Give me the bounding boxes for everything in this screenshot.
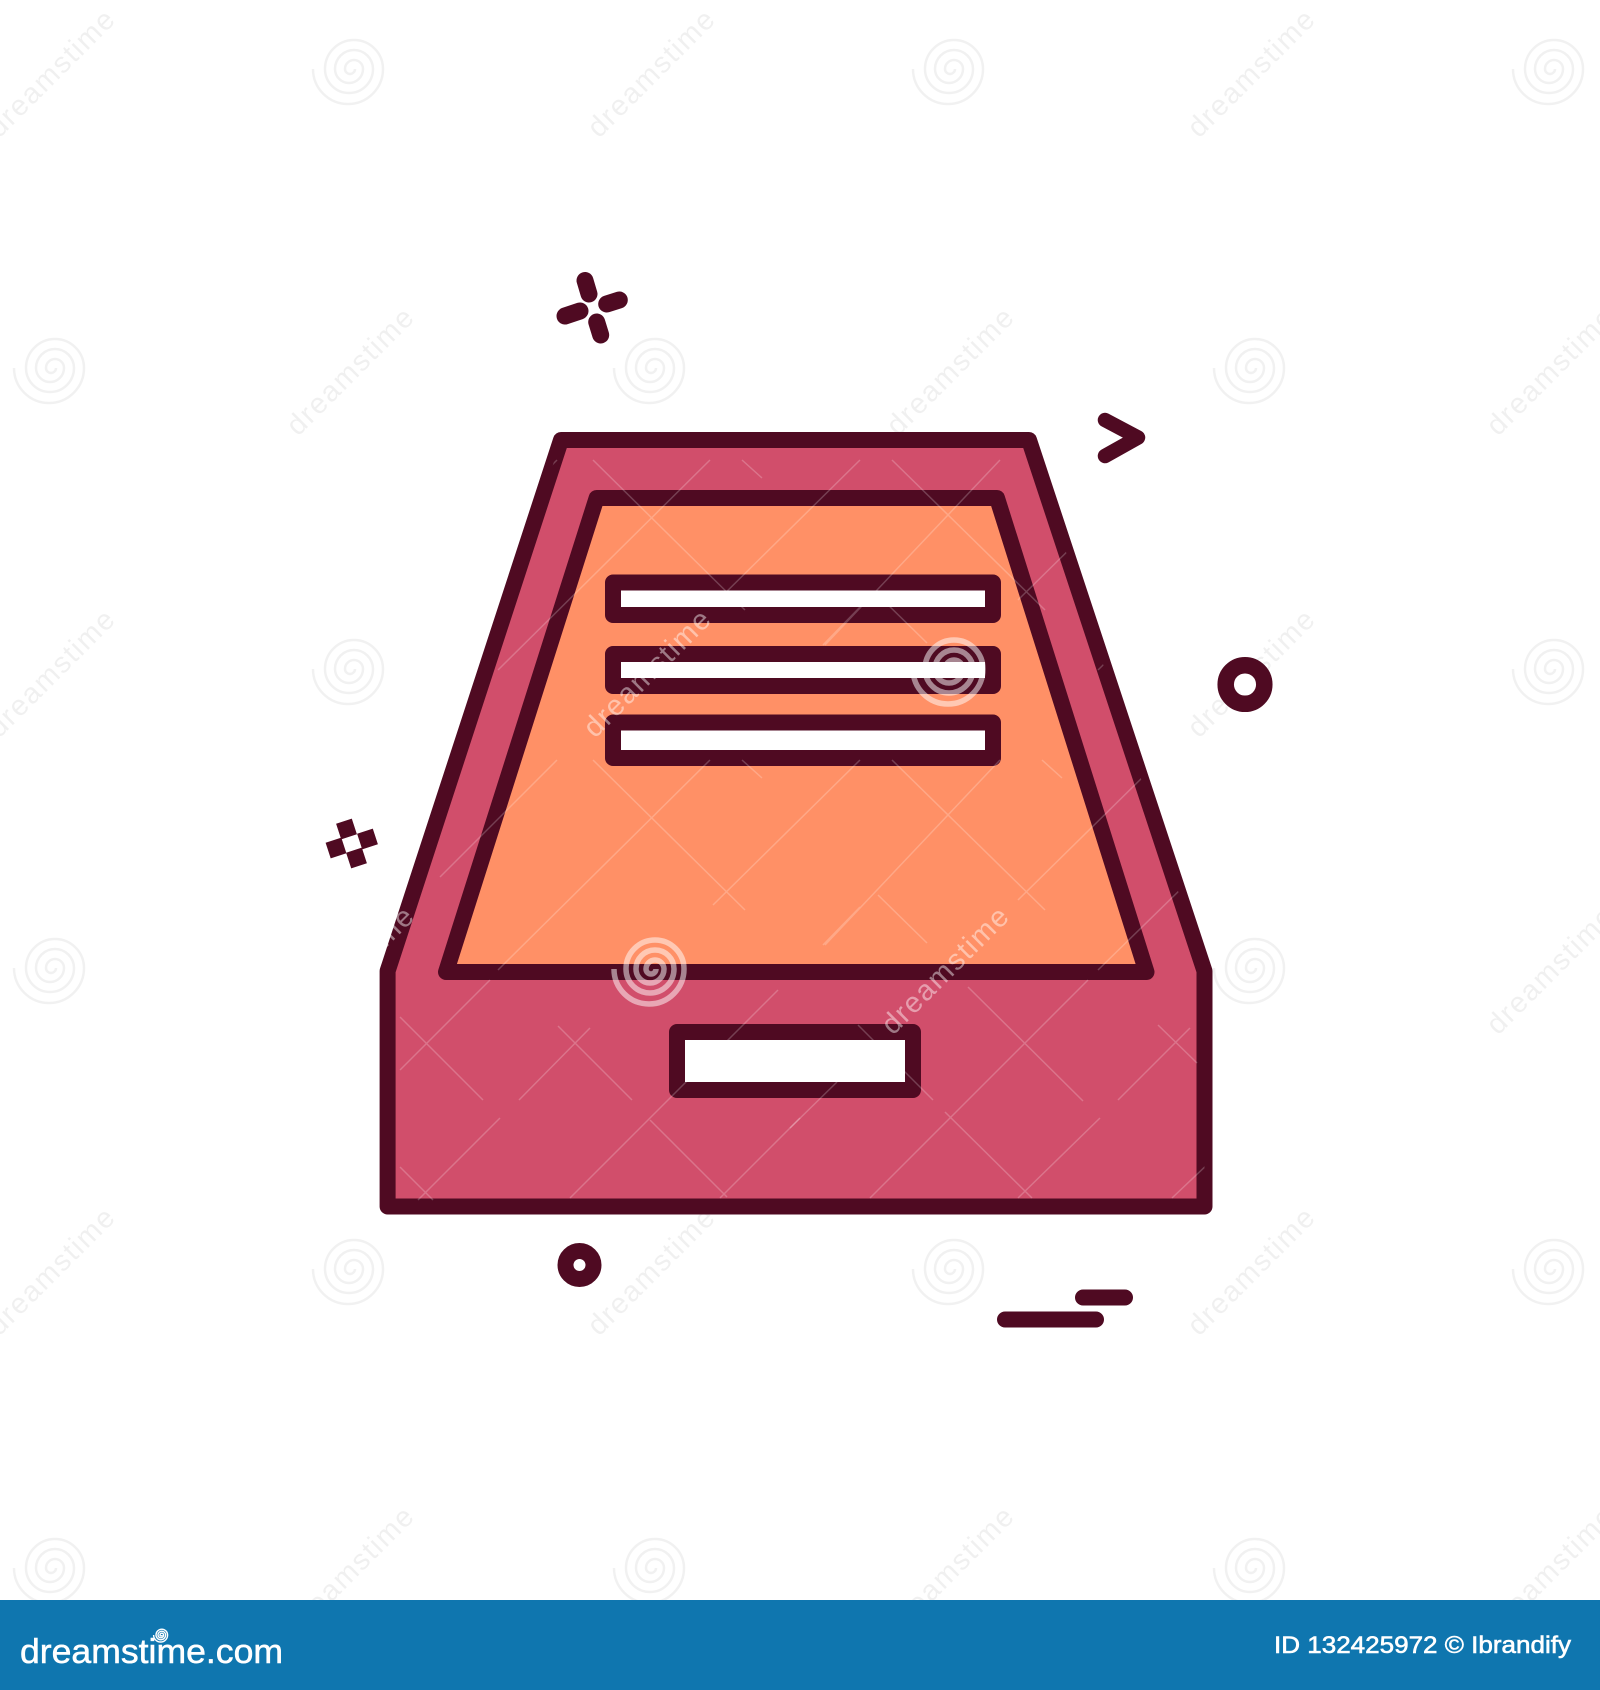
logo: dreamstime.com: dreamstime.com [20,1633,283,1671]
image id and credit: ID 132425972 © Ibrandify [1274,1632,1572,1659]
watermark overlay on the tray: dreamstime [577,604,717,744]
decoration: ring right [1226,665,1264,704]
icon: drawer tray [388,440,1205,1206]
decoration: checker squares [326,819,378,868]
decoration: chevron [1105,420,1138,456]
decoration: four-petal sparkle [565,280,619,335]
watermark overlay on the tray: dreamstime [875,901,1015,1041]
watermark: faint background spirals and wordmarks: dreamstime [1181,4,1321,144]
watermark: faint background spirals and wordmarks: dreamstime [280,302,420,442]
decoration: ring bottom [566,1251,594,1279]
watermark: faint background spirals and wordmarks: dreamstime [1181,1202,1321,1342]
watermark: faint background spirals and wordmarks: dreamstime [1181,604,1321,744]
watermark overlay on the tray [280,460,1210,1200]
watermark: faint background spirals and wordmarks: dreamstime [880,1501,1020,1641]
footer band [0,1600,1600,1690]
watermark: faint background spirals and wordmarks: dreamstime [880,302,1020,442]
decoration: dashes [1005,1298,1125,1320]
watermark: faint background spirals and wordmarks: dreamstime [581,4,721,144]
tray inner paper [446,498,1146,972]
watermark overlay on the tray: dreamstime [280,901,420,1041]
text line 3 [613,722,993,758]
watermark: faint background spirals and wordmarks: dreamstime [581,1202,721,1342]
text line 2 [613,654,993,686]
tray body [388,440,1205,1206]
watermark: faint background spirals and wordmarks: dreamstime [280,1501,420,1641]
drawer handle label [677,1032,913,1090]
text line 1 [613,582,993,615]
